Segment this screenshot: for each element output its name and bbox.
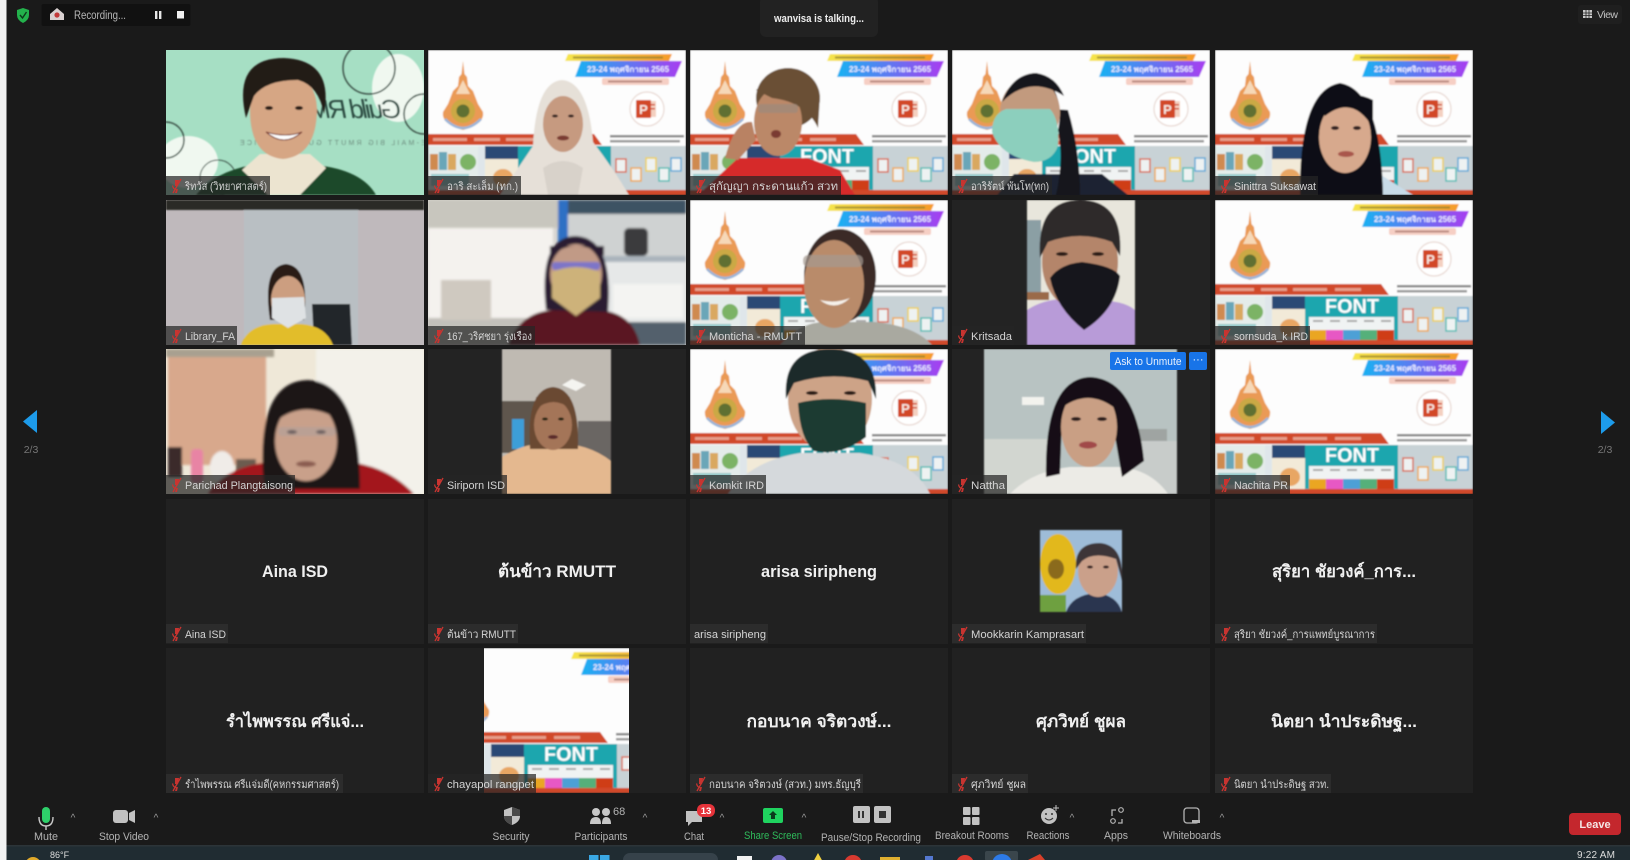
- chat control: Chat: [684, 831, 704, 843]
- name label: [428, 774, 536, 793]
- name label: [166, 475, 295, 494]
- view button: [1578, 5, 1622, 24]
- name label: Sinittra Suksawat: [1234, 181, 1316, 193]
- name label: [428, 624, 518, 643]
- tile: sornsuda_k IRD: FONT: [1325, 296, 1379, 318]
- tile: Siriporn ISD: [428, 349, 686, 494]
- stop video control: Stop Video: [99, 831, 149, 843]
- tile: Sinittra Suksawat: 23-24 พฤศจิกายน 2565: [1374, 65, 1457, 74]
- share screen control: ^: [802, 813, 807, 824]
- tile: arisa siripheng: arisa siripheng: [761, 562, 877, 581]
- tile: arisa siripheng: [690, 499, 948, 644]
- active speaker banner: [760, 0, 878, 37]
- tile: 167_วริศชยา: [428, 200, 686, 345]
- name label: [166, 326, 237, 345]
- name label: อาริรัตน์ พันโท(ทก): [971, 179, 1049, 193]
- tile: Aina ISD: [166, 499, 424, 644]
- name label: สุกัญญา กระดานแก้ว สวท: [709, 181, 838, 193]
- tile: อาริ สะเล็ม: 23-24 พฤศจิกายน 2565: [587, 65, 670, 74]
- arrow: previous page: 2/3: [24, 444, 38, 456]
- apps control: [1104, 808, 1128, 842]
- tile: สุกัญญา: FONT: [800, 146, 854, 168]
- name label: [958, 475, 1007, 494]
- tile: อาริรัตน์: FONT: [1062, 146, 1116, 168]
- participants control: Participants: [574, 831, 628, 843]
- tile: นิตยา นำประดิษฐ: [1215, 648, 1473, 793]
- tile: Monticha - RMUTT: 23-24 พฤศจิกายน 2565: [849, 215, 932, 224]
- name label: Nattha: [971, 480, 1006, 492]
- weather widget: [25, 850, 70, 860]
- share screen control: Share Screen: [744, 830, 802, 842]
- tile: ศุภวิทย์ ชูผล: ศุภวิทย์ ชูผล: [1036, 711, 1126, 733]
- name label: [166, 624, 228, 643]
- shared slide video: [484, 648, 629, 793]
- pause and stop recording control: Pause/Stop Recording: [821, 832, 921, 844]
- mute control: Mute: [34, 831, 58, 843]
- stop video control: ^: [154, 813, 159, 824]
- chat control: [684, 804, 725, 843]
- name label: [952, 176, 1052, 195]
- profile photo: [1040, 530, 1122, 612]
- whiteboards control: Whiteboards: [1163, 830, 1221, 842]
- name label: Kritsada: [971, 331, 1013, 343]
- tile: Aina ISD: Aina ISD: [262, 562, 328, 581]
- name label: อาริ สะเล็ม (ทก.): [447, 179, 518, 193]
- tile: อาริรัตน์: [952, 50, 1210, 195]
- name label: [690, 326, 805, 345]
- leave button: [1569, 813, 1621, 835]
- tile: Komkit IRD: [690, 347, 948, 494]
- mute control: ^: [71, 813, 76, 824]
- stop video control: [99, 810, 159, 843]
- name label: [958, 328, 1012, 344]
- tile: ศุภวิทย์ ชูผล: [952, 648, 1210, 793]
- tile: ริทวัส: [166, 50, 424, 195]
- reactions control: [1026, 805, 1075, 842]
- name label: รำไพพรรณ ศรีแจ่มดี(คหกรรมศาสตร์): [185, 778, 339, 791]
- more options button: [1189, 352, 1207, 370]
- name label: [952, 774, 1028, 793]
- tile: อาริ สะเล็ม: [428, 50, 686, 195]
- name label: ต้นข้าว RMUTT: [447, 629, 516, 641]
- name label: [690, 624, 768, 643]
- tile: Monticha - RMUTT: [690, 200, 948, 345]
- name label: Komkit IRD: [709, 480, 764, 492]
- chat control: 13: [701, 806, 711, 817]
- name label: [952, 624, 1086, 643]
- name label: [166, 176, 270, 195]
- tile: Kritsada: [952, 200, 1210, 345]
- toolbar: [34, 804, 1621, 844]
- tile: สุกัญญา: 23-24 พฤศจิกายน 2565: [849, 65, 932, 74]
- tile: chayapol rangpet: [428, 648, 629, 793]
- tile: Parichad Plangtaisong: [166, 349, 424, 494]
- tile: Komkit IRD: 23-24 พฤศจิกายน 2565: [849, 364, 932, 373]
- arrow: next page: [1598, 411, 1615, 456]
- security control: Security: [492, 831, 530, 843]
- name label: [690, 774, 863, 793]
- name label: [1215, 176, 1318, 195]
- tile: สุริยา ชัยวงค์: [1215, 499, 1473, 644]
- name label: กอบนาค จริตวงษ์ (สวท.) มทร.ธัญบุรี: [709, 778, 861, 791]
- start button: [589, 855, 610, 860]
- name label: [1215, 624, 1377, 643]
- search box: [623, 853, 718, 860]
- security shield icon: [17, 8, 29, 23]
- breakout rooms control: Breakout Rooms: [935, 830, 1009, 842]
- shared slide video: FONT: [544, 744, 598, 766]
- share screen control: [744, 808, 807, 842]
- participants control: ^: [643, 813, 648, 824]
- tile: สุริยา ชัยวงค์: สุริยา ชัยวงค์_การ...: [1272, 561, 1416, 582]
- pause and stop recording control: [821, 806, 921, 844]
- tile: Nachita PR: FONT: [1325, 445, 1379, 467]
- name label: [428, 326, 535, 345]
- tile: sornsuda_k IRD: [1215, 200, 1473, 345]
- name label: Parichad Plangtaisong: [185, 480, 293, 492]
- windows taskbar: [6, 845, 1630, 860]
- name label: [690, 475, 766, 494]
- active speaker banner: wanvisa is talking...: [773, 13, 864, 25]
- tile: รำไพพรรณ: [166, 648, 424, 793]
- tile: Komkit IRD: FONT: [800, 445, 854, 467]
- more options button: ···: [1192, 354, 1204, 366]
- tile: Sinittra Suksawat: [1215, 50, 1473, 195]
- name label: [428, 176, 521, 195]
- tile: Nachita PR: [1215, 349, 1473, 494]
- name label: Library_FA: [185, 331, 236, 343]
- name label: chayapol rangpet: [447, 779, 534, 791]
- arrow: previous page: [23, 410, 38, 456]
- tile: ริทวัส: E-MAIL BIG RMUTT GUILD SERVICE: [240, 140, 426, 147]
- chat control: ^: [720, 813, 725, 824]
- participants control: [574, 806, 648, 843]
- name label: Mookkarin Kamprasart: [971, 629, 1084, 641]
- ask to unmute button: Ask to Unmute: [1114, 356, 1182, 368]
- tile: Library_FA: [166, 200, 424, 345]
- name label: Siriporn ISD: [447, 480, 505, 492]
- name label: Monticha - RMUTT: [709, 331, 802, 343]
- leave button: Leave: [1579, 819, 1611, 831]
- weather widget: 86°F: [50, 850, 70, 860]
- reactions control: Reactions: [1026, 830, 1070, 842]
- name label: ศุภวิทย์ ชูผล: [971, 778, 1026, 791]
- tile: ต้นข้าว RMUTT: ต้นข้าว RMUTT: [498, 562, 617, 581]
- recording indicator: [42, 4, 190, 26]
- participants control: 68: [613, 806, 625, 818]
- tile: Nachita PR: 23-24 พฤศจิกายน 2565: [1374, 364, 1457, 373]
- tile: Monticha - RMUTT: FONT: [800, 296, 854, 318]
- tile: Nattha: [952, 349, 1210, 494]
- reactions control: ^: [1070, 813, 1075, 824]
- name label: [690, 176, 841, 195]
- name label: [428, 475, 507, 494]
- tile: Mookkarin Kamprasart: [952, 499, 1210, 644]
- recording indicator: Recording...: [74, 10, 126, 22]
- name label: สุริยา ชัยวงค์_การแพทย์บูรณาการ: [1234, 628, 1375, 641]
- tile: กอบนาค: กอบนาค จริตวงษ์...: [746, 711, 892, 731]
- tile: สุกัญญา: [690, 50, 948, 195]
- tile: ริทวัส: Guild RMUTT: [263, 94, 401, 124]
- ask to unmute button: [1110, 352, 1186, 370]
- arrow: next page: 2/3: [1598, 444, 1612, 456]
- shared slide video: 23-24 พฤศจิกายน 2565: [593, 663, 676, 672]
- view button: View: [1597, 9, 1618, 21]
- tile: นิตยา นำประดิษฐ: นิตยา นำประดิษฐ...: [1271, 712, 1417, 733]
- name label: [166, 774, 343, 793]
- name label: Nachita PR: [1234, 480, 1288, 492]
- name label: arisa siripheng: [694, 629, 766, 641]
- name label: [1215, 475, 1290, 494]
- apps control: Apps: [1104, 830, 1128, 842]
- mute control: [34, 807, 76, 843]
- tile: อาริรัตน์: 23-24 พฤศจิกายน 2565: [1111, 65, 1194, 74]
- white strip at left edge: [0, 0, 6, 860]
- name label: [1215, 774, 1331, 793]
- tile: sornsuda_k IRD: 23-24 พฤศจิกายน 2565: [1374, 215, 1457, 224]
- tile: ต้นข้าว RMUTT: [428, 499, 686, 644]
- tile: รำไพพรรณ: รำไพพรรณ ศรีแจ่...: [226, 711, 364, 731]
- whiteboards control: [1163, 808, 1225, 842]
- tile: กอบนาค: [690, 648, 948, 793]
- security control: [492, 807, 530, 843]
- name label: sornsuda_k IRD: [1234, 331, 1308, 343]
- breakout rooms control: [935, 807, 1009, 842]
- name label: [1215, 326, 1310, 345]
- whiteboards control: ^: [1220, 813, 1225, 824]
- name label: 167_วริศชยา รุ่งเรือง: [447, 330, 532, 343]
- name label: นิตยา นำประดิษฐ สวท.: [1234, 779, 1329, 791]
- pinned taskbar icons: [737, 851, 1045, 860]
- name label: Aina ISD: [185, 629, 226, 641]
- name label: ริทวัส (วิทยาศาสตร์): [184, 180, 267, 193]
